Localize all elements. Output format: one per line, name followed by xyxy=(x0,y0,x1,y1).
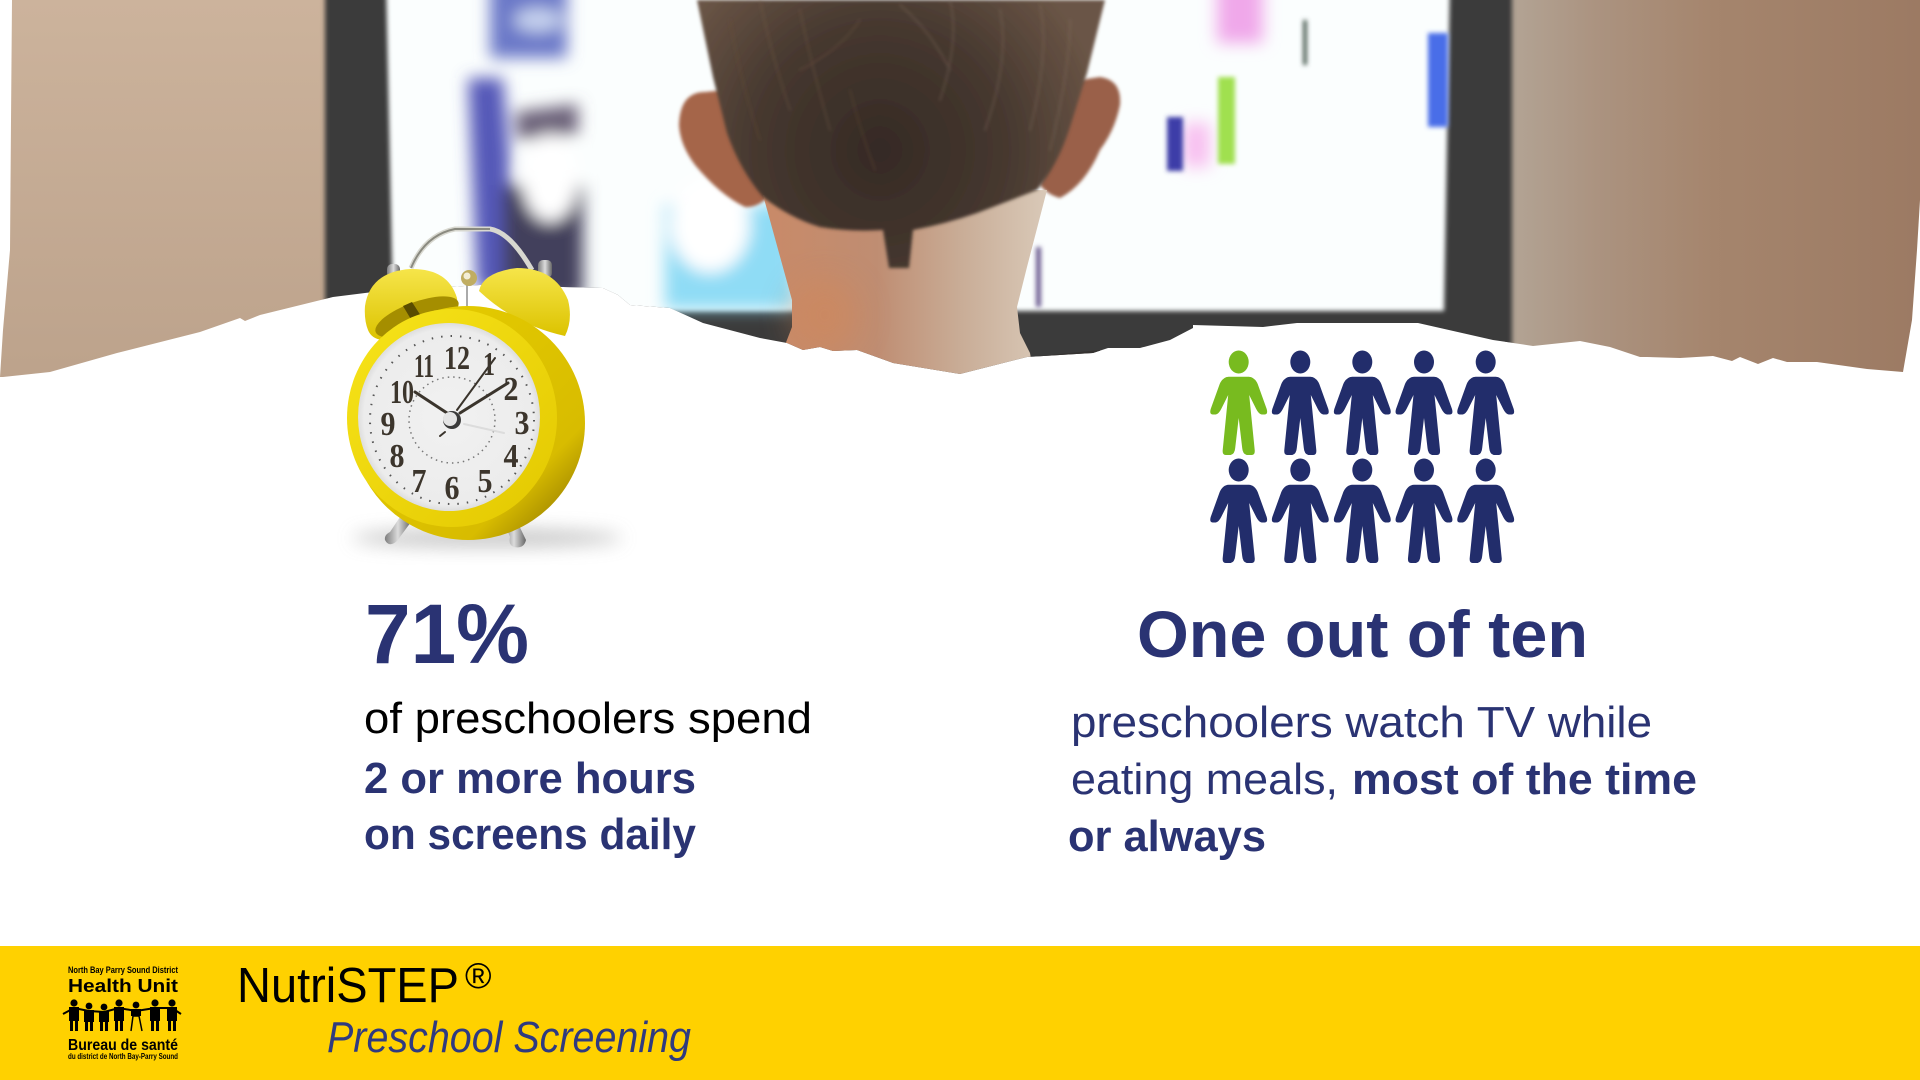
shirt collar xyxy=(1030,350,1100,357)
health unit name: Health Unit xyxy=(68,976,178,996)
center pin xyxy=(443,411,461,429)
left statistic text xyxy=(364,587,812,859)
clock body xyxy=(351,306,585,540)
bold line two: on screens daily xyxy=(364,810,697,859)
clock numerals: 5 xyxy=(478,463,492,500)
clock numerals: 11 xyxy=(414,348,434,385)
right statistic text xyxy=(1068,597,1697,861)
clock numerals: 6 xyxy=(444,470,460,507)
left bell xyxy=(365,269,463,346)
hair xyxy=(697,0,1105,268)
neck xyxy=(763,190,1047,380)
clock numerals: 9 xyxy=(380,406,396,443)
people holding hands xyxy=(63,999,181,1031)
clock numerals: 4 xyxy=(504,438,518,475)
footer band xyxy=(0,946,1920,1080)
knobs xyxy=(387,264,400,278)
right ear xyxy=(1040,77,1120,198)
clock face xyxy=(358,323,540,511)
body line: of preschoolers spend xyxy=(364,694,812,743)
wall left xyxy=(0,0,330,390)
bold emphasis: most of the time xyxy=(1352,755,1697,804)
body line one: preschoolers watch TV while xyxy=(1071,698,1652,747)
french name: Bureau de santé xyxy=(68,1037,178,1054)
clock numerals: 1 xyxy=(483,346,495,383)
clock shadow xyxy=(352,529,622,547)
bold line three: or always xyxy=(1068,812,1266,861)
television screen xyxy=(386,0,1450,311)
french district name: du district de North Bay-Parry Sound xyxy=(68,1052,178,1061)
registered mark: ® xyxy=(465,955,492,996)
clock numerals: 10 xyxy=(390,374,414,411)
bell support xyxy=(510,312,530,334)
clock numerals: 3 xyxy=(514,405,530,442)
yellow rim xyxy=(347,309,557,527)
wall right xyxy=(1505,0,1920,390)
district name: North Bay Parry Sound District xyxy=(68,965,178,975)
footer subtitle: Preschool Screening xyxy=(327,1013,691,1062)
clock feet xyxy=(385,517,411,544)
heading: 71%: 71% xyxy=(365,587,529,681)
background photo: child watching television xyxy=(0,0,1920,390)
alarm clock xyxy=(347,229,622,547)
inner dotted ring xyxy=(409,377,495,463)
pictogram: one out of ten people xyxy=(1210,350,1514,563)
clock numerals: 12 xyxy=(444,340,470,377)
neck warm shading xyxy=(776,282,852,342)
television bezel xyxy=(325,0,1512,390)
bottom row people xyxy=(1210,458,1514,563)
heading: one out of ten: One out of ten xyxy=(1137,597,1588,671)
handle xyxy=(411,229,532,270)
clock numerals: 2 xyxy=(504,371,518,408)
clock numerals xyxy=(380,340,530,507)
finial xyxy=(466,284,468,312)
top row people xyxy=(1272,350,1514,455)
product name: NutriSTEP xyxy=(237,959,459,1013)
clock numerals: 8 xyxy=(390,438,404,475)
person highlighted green xyxy=(1210,350,1267,455)
body line two: eating meals, xyxy=(1071,755,1338,804)
minute track xyxy=(370,336,534,504)
bold line one: 2 or more hours xyxy=(364,754,696,803)
clock numerals: 7 xyxy=(412,463,426,500)
left ear xyxy=(679,90,775,207)
right bell xyxy=(479,268,570,336)
footer title: NutriSTEP xyxy=(237,955,492,1013)
hair strands xyxy=(760,0,1001,130)
health unit logo xyxy=(63,965,181,1061)
clock hands xyxy=(415,358,508,436)
